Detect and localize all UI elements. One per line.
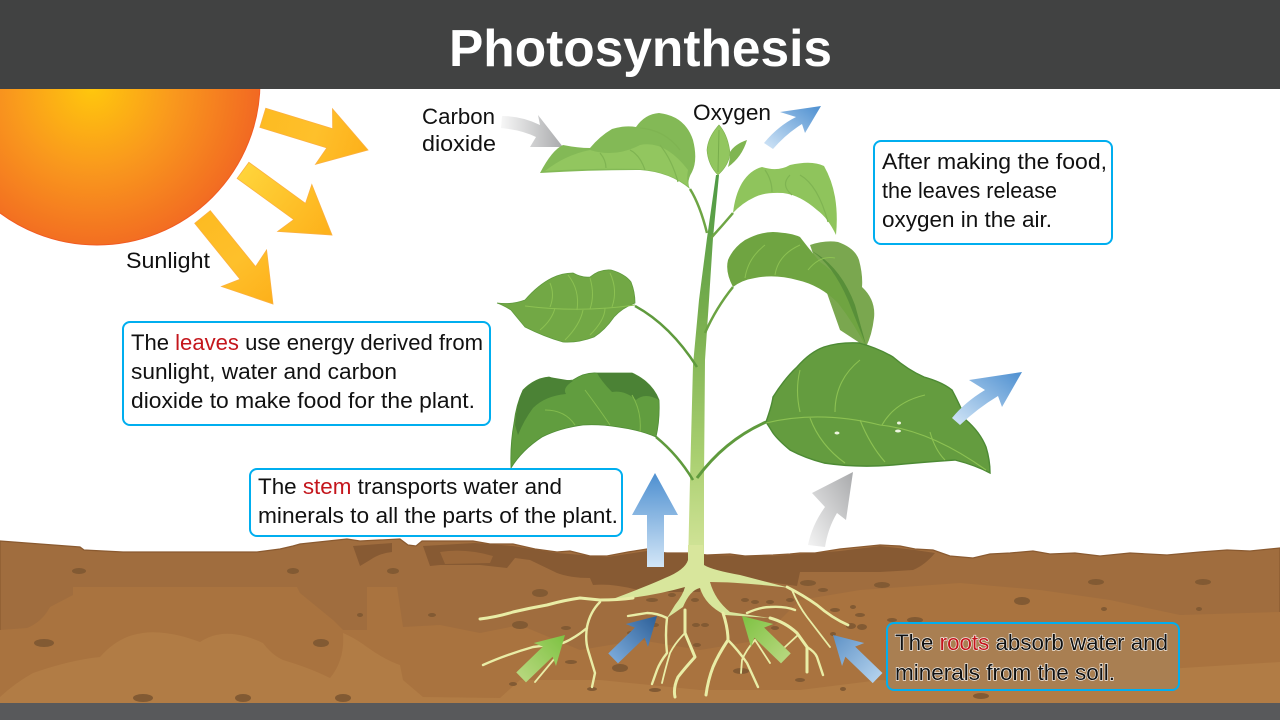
arrow: oxygen out: [764, 106, 821, 149]
leaf: lower left: [511, 373, 693, 480]
label: carbon dioxide: Carbon: [422, 104, 495, 129]
soil: light lower layer: [0, 632, 1280, 703]
callout: stem: [250, 469, 622, 536]
callout: leaves: sunlight, water and carbon: [131, 359, 397, 384]
footer bar: [0, 703, 1280, 720]
leaf: middle left: [497, 270, 697, 367]
illustration: plant stem: [688, 175, 719, 565]
leaf: middle right: [705, 232, 874, 347]
label: carbon dioxide: [422, 104, 496, 156]
callout: roots: minerals from the soil.: [895, 660, 1115, 685]
callout: stem: minerals to all the parts of the plant.: [258, 503, 618, 528]
icon: sun: [0, 0, 260, 245]
panel: title bar: [0, 0, 1280, 89]
callout: oxygen release: [874, 141, 1112, 244]
arrow: blue root center: [602, 604, 668, 670]
callout: oxygen release: After making the food,: [882, 149, 1107, 174]
arrow: sunlight 2: [226, 147, 349, 258]
soil: middle layer: [0, 583, 1280, 703]
arrow: sunlight 3: [180, 199, 296, 322]
callout: roots: [887, 623, 1179, 690]
callout: oxygen release: oxygen in the air.: [882, 207, 1052, 232]
callout: leaves: [123, 322, 490, 425]
arrow: blue root right: [822, 623, 889, 690]
arrow: sunlight 1: [254, 90, 376, 178]
callout: leaves: dioxide to make food for the plant.: [131, 388, 475, 413]
title: Photosynthesis: [449, 20, 832, 78]
arrow: green root left: [510, 623, 576, 689]
callout: roots: The roots absorb water and: [895, 630, 1168, 655]
callout: leaves: The leaves use energy derived from: [131, 330, 483, 355]
arrow: water up stem: [632, 473, 678, 567]
leaf: upper right: [711, 163, 837, 238]
panel: soil ground: [0, 539, 1280, 703]
arrow: gray rising gas: [808, 472, 853, 547]
label: carbon dioxide: dioxide: [422, 131, 496, 156]
callout: stem: The stem transports water and: [258, 474, 562, 499]
soil: dark upper patches: [353, 543, 935, 592]
leaf: top left: [540, 113, 707, 233]
soil: clods: [34, 568, 1211, 702]
label: oxygen: Oxygen: [693, 100, 771, 125]
arrow: blue gas leaving leaf: [952, 372, 1022, 425]
arrow: green root right: [731, 604, 797, 670]
illustration: roots: [480, 545, 848, 697]
label: sunlight: Sunlight: [126, 248, 210, 273]
leaf: top small buds: [707, 125, 747, 175]
illustration: plant leaves: [497, 113, 990, 480]
arrow: carbon dioxide: [501, 115, 563, 147]
callout: oxygen release: the leaves release: [882, 178, 1057, 203]
leaf: lower right: [697, 343, 990, 478]
